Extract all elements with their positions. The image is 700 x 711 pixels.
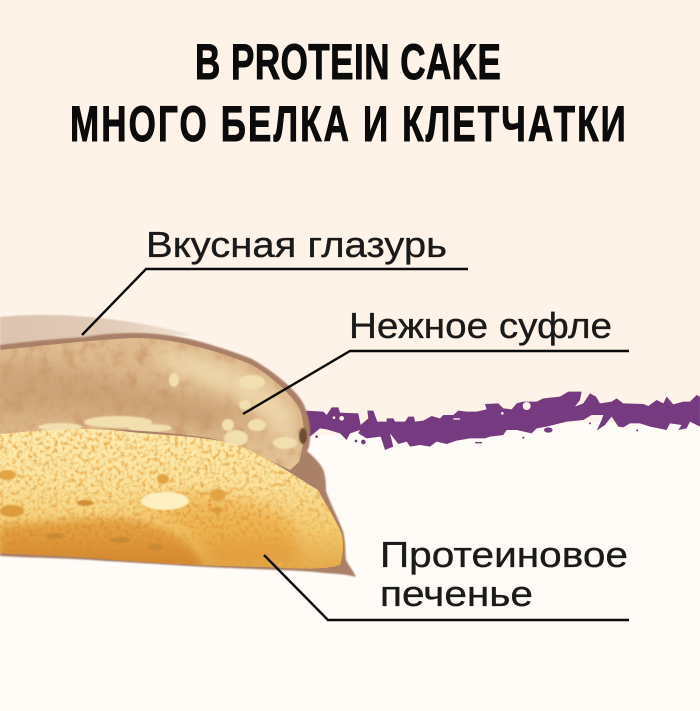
soufflé: crumbs bbox=[38, 373, 297, 449]
biscuit: pale crumb and pores bbox=[0, 470, 226, 550]
label: protein biscuit bbox=[264, 534, 629, 620]
title bbox=[70, 35, 626, 153]
title line 2: МНОГО БЕЛКА И КЛЕТЧАТКИ bbox=[70, 97, 626, 153]
cake: chocolate glaze outline bbox=[0, 333, 356, 577]
purple brush stroke bbox=[305, 392, 700, 450]
cake: soufflé shading bbox=[0, 350, 297, 450]
biscuit: amber middle bbox=[130, 494, 300, 565]
leader line: soufflé bbox=[243, 351, 629, 414]
leader line: biscuit bbox=[264, 555, 629, 620]
title line 1: В PROTEIN CAKE bbox=[195, 35, 501, 91]
cake: glaze top surface bbox=[0, 315, 192, 347]
text: glaze: Вкусная глазурь bbox=[146, 224, 447, 265]
label: soufflé bbox=[243, 305, 629, 414]
cake: biscuit shading bbox=[0, 494, 300, 570]
cake: dark notch bbox=[299, 428, 307, 444]
leader line: glaze bbox=[82, 269, 468, 335]
cake: biscuit layer bbox=[0, 429, 343, 569]
label: glaze bbox=[82, 224, 468, 335]
cake: soufflé layer bbox=[0, 338, 304, 470]
text: biscuit line 2: печенье bbox=[380, 573, 533, 614]
cake cross-section bbox=[0, 315, 356, 577]
biscuit: dark base bbox=[0, 518, 205, 570]
background: cream upper area bbox=[0, 0, 700, 436]
soufflé: dark band bbox=[0, 362, 240, 432]
soufflé: light upper right bbox=[150, 350, 296, 450]
text: biscuit line 1: Протеиновое bbox=[380, 534, 628, 575]
background: white lower area bbox=[0, 420, 700, 711]
text: soufflé: Нежное суфле bbox=[349, 305, 612, 346]
